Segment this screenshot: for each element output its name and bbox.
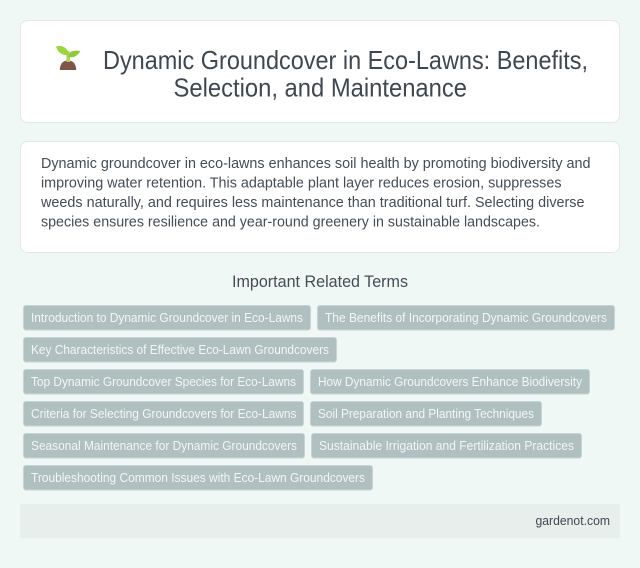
text block: description: improving water retention. This adaptable plant layer reduces erosion, suppresses — [41, 176, 562, 192]
tag: criteria — [24, 402, 304, 426]
tag: irrigation: Sustainable Irrigation and Fertilization Practices — [319, 439, 574, 453]
tag: criteria: Criteria for Selecting Groundcovers for Eco-Lawns — [31, 407, 296, 421]
title: Selection, and Maintenance — [174, 72, 467, 102]
tag: troubleshooting — [24, 466, 372, 490]
text block: description: weeds naturally, and requires less maintenance than traditional turf. Selecting diverse — [40, 195, 585, 211]
tag: top species — [24, 370, 304, 394]
tag: key characteristics — [24, 338, 336, 362]
tag: introduction — [24, 306, 310, 330]
tag: biodiversity: How Dynamic Groundcovers Enhance Biodiversity — [318, 375, 583, 389]
tag: key characteristics: Key Characteristics of Effective Eco-Lawn Groundcovers — [31, 343, 329, 357]
tag: seasonal maintenance — [24, 434, 304, 458]
panel: description card — [20, 142, 620, 252]
tag: benefits — [318, 306, 614, 330]
tag: introduction: Introduction to Dynamic Groundcover in Eco-Lawns — [31, 311, 303, 325]
icon: seedling — [56, 46, 80, 70]
footer — [20, 504, 620, 538]
title: Dynamic Groundcover in Eco-Lawns: Benefits, — [103, 45, 588, 75]
title — [103, 45, 588, 102]
tag: top species: Top Dynamic Groundcover Species for Eco-Lawns — [31, 375, 296, 389]
panel: title card — [20, 20, 620, 122]
tag group: related terms — [24, 306, 614, 490]
tag: seasonal maintenance: Seasonal Maintenance for Dynamic Groundcovers — [31, 439, 297, 453]
heading: related terms: Important Related Terms — [232, 273, 408, 291]
tag: soil preparation: Soil Preparation and Planting Techniques — [318, 407, 534, 421]
tag: benefits: The Benefits of Incorporating Dynamic Groundcovers — [325, 311, 607, 325]
tag: irrigation — [312, 434, 582, 458]
text block: description: Dynamic groundcover in eco-lawns enhances soil health by promoting biodiversity and — [41, 156, 590, 172]
footer: gardenot.com — [536, 513, 610, 528]
tag: soil preparation — [310, 402, 542, 426]
text block: description — [40, 156, 591, 230]
tag: troubleshooting: Troubleshooting Common Issues with Eco-Lawn Groundcovers — [31, 471, 365, 485]
text block: description: species ensures resilience and year-round greenery in sustainable landscapes. — [41, 214, 540, 230]
tag: biodiversity — [310, 370, 590, 394]
